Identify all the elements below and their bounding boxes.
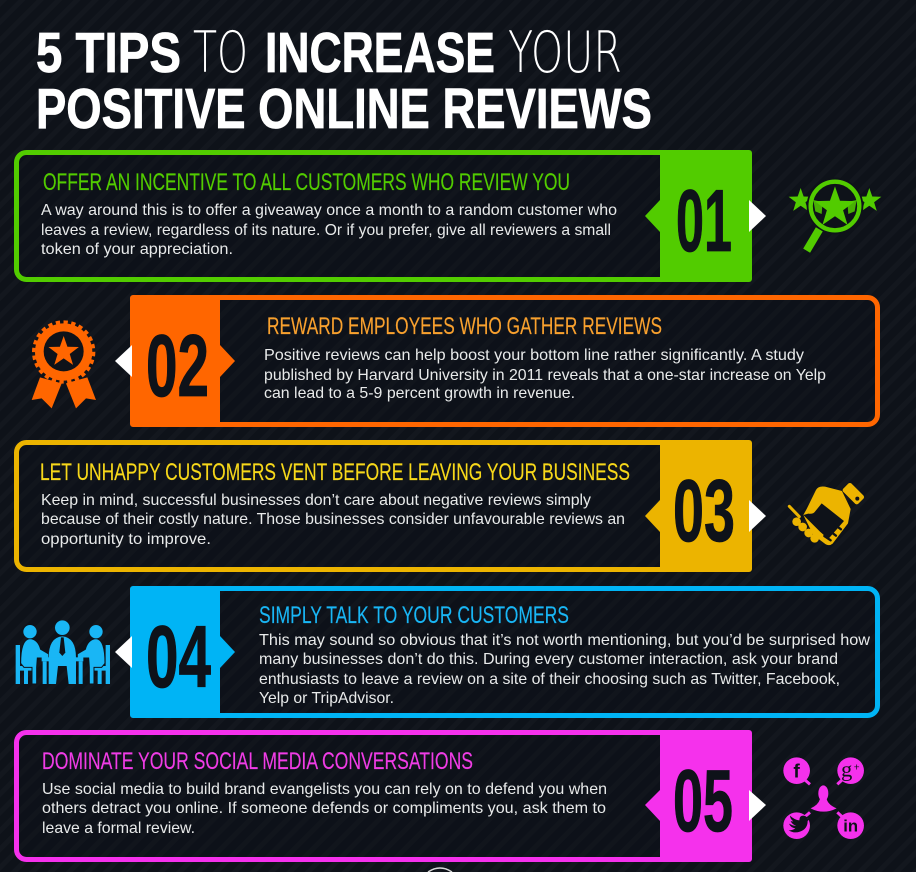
body text 05: others detract you online. If someone defends or compliments you, ask them to [42, 800, 606, 817]
icon: magnifier with stars [789, 178, 881, 251]
icon: award rosette [32, 322, 96, 408]
partial circle at bottom edge [428, 868, 452, 872]
body text 03: Keep in mind, successful businesses don’t care about negative reviews simply [41, 492, 591, 509]
panel: tip 03 [16, 440, 766, 572]
number block 03 [645, 440, 766, 572]
body text 02: published by Harvard University in 2011 reveals that a one-star increase on Yelp [264, 367, 826, 384]
body text 04: Yelp or TripAdvisor. [259, 690, 394, 707]
icon: social media network: g [841, 757, 852, 782]
body text 05 [42, 781, 607, 837]
panel: tip 01 [16, 150, 766, 282]
number block 04: 04 [146, 607, 211, 706]
number block 01: 01 [676, 171, 732, 270]
title: POSITIVE ONLINE REVIEWS [36, 77, 652, 141]
number block 01 [645, 150, 766, 282]
title: INCREASE [265, 21, 495, 85]
body text 01: leaves a review, regardless of its nature. Or if you prefer, give all reviewers a small [41, 222, 611, 239]
body text 03: because of their costly nature. Those businesses consider unfavourable reviews an [41, 511, 625, 528]
number block 05 [645, 730, 766, 862]
icon: social media network [783, 757, 864, 839]
body text 02: Positive reviews can help boost your bottom line rather significantly. A study [264, 347, 804, 364]
heading 03: LET UNHAPPY CUSTOMERS VENT BEFORE LEAVING YOUR BUSINESS [40, 459, 630, 486]
icon: team meeting [16, 620, 110, 684]
heading 02: REWARD EMPLOYEES WHO GATHER REVIEWS [267, 313, 662, 340]
icon: social media network: + [854, 763, 860, 774]
icon: social media network: f [793, 762, 800, 783]
body text 05: Use social media to build brand evangelists you can rely on to defend you when [42, 781, 607, 798]
body text 02 [264, 347, 826, 402]
body text 02: can lead to a 5-9 percent growth in revenue. [264, 385, 575, 402]
number block 05: 05 [673, 751, 733, 850]
icon: handshake [789, 482, 865, 545]
heading 04: SIMPLY TALK TO YOUR CUSTOMERS [259, 602, 569, 629]
body text 04: enthusiasts to leave a review on a site of their choosing such as Twitter, Facebook, [259, 671, 840, 688]
body text 01 [41, 202, 617, 258]
title [36, 20, 652, 141]
panel: tip 04 [115, 586, 878, 718]
title: YOUR [508, 20, 622, 86]
title: TO [193, 20, 248, 86]
title: 5 TIPS [36, 21, 181, 85]
body text 05: leave a formal review. [42, 820, 195, 837]
number block 02: 02 [146, 316, 209, 415]
number block 04 [115, 586, 235, 718]
heading 05: DOMINATE YOUR SOCIAL MEDIA CONVERSATIONS [42, 748, 473, 775]
body text 01: A way around this is to offer a giveaway once a month to a random customer who [41, 202, 617, 219]
body text 01: token of your appreciation. [41, 241, 233, 258]
body text 03: opportunity to improve. [41, 531, 211, 548]
panel: tip 02 [115, 295, 878, 427]
number block 03: 03 [673, 461, 735, 560]
heading 01: OFFER AN INCENTIVE TO ALL CUSTOMERS WHO REVIEW YOU [43, 169, 570, 196]
body text 04: many businesses don’t do this. During every customer interaction, ask your brand [259, 651, 838, 668]
number block 02 [115, 295, 235, 427]
panel: tip 05 [16, 730, 766, 862]
body text 04 [259, 632, 870, 707]
body text 03 [41, 492, 625, 548]
body text 04: This may sound so obvious that it’s not worth mentioning, but you’d be surprised how [259, 632, 870, 649]
icon: social media network: in [843, 817, 858, 836]
